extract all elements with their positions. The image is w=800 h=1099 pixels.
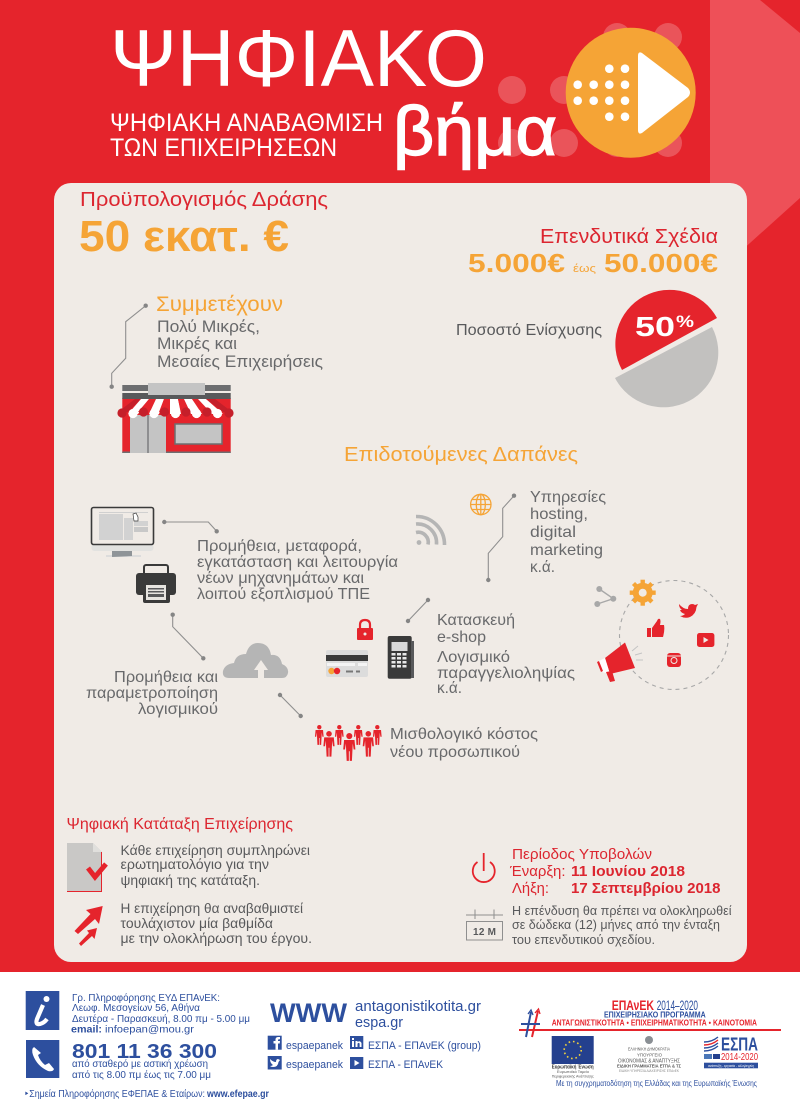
text: staff cost: νέου προσωπικού bbox=[390, 744, 520, 761]
investment plans heading: Επενδυτικά Σχέδια bbox=[540, 226, 718, 248]
icon: wifi bbox=[416, 516, 445, 545]
ministry logo: ΕΛΛΗΝΙΚΗ ΔΗΜΟΚΡΑΤΙΑ bbox=[628, 1046, 670, 1052]
text: e-shop: κ.ά. bbox=[437, 680, 462, 697]
contact details: Δευτέρα - Παρασκευή, 8.00 πμ - 5.00 μμ bbox=[72, 1013, 250, 1025]
text: software: παραμετροποίηση bbox=[86, 685, 218, 702]
icon: share bbox=[594, 586, 616, 607]
ESPA logo: ανάπτυξη - εργασία - αλληλεγγύη bbox=[708, 1063, 754, 1068]
participants heading: Συμμετέχουν bbox=[156, 293, 283, 316]
text: services: hosting, bbox=[530, 506, 588, 523]
icon: telephone bbox=[26, 1040, 59, 1078]
icon: cloud upload bbox=[223, 643, 288, 678]
pie chart: 50%: % bbox=[676, 312, 694, 331]
text: questionnaire bbox=[120, 843, 310, 888]
icon: calendar 12M bbox=[466, 910, 503, 940]
text: questionnaire: ερωτηματολόγιο για την bbox=[120, 857, 269, 872]
icon: twitter bbox=[268, 1056, 282, 1070]
text: e-shop bbox=[437, 612, 575, 697]
investment range: έως bbox=[573, 263, 596, 275]
text: equipment: λοιπού εξοπλισμού ΤΠΕ bbox=[197, 586, 370, 603]
contact details: infoepan@mou.gr bbox=[105, 1024, 195, 1036]
EPAnEK programme header bbox=[519, 997, 781, 1031]
text: project duration: του επενδυτικού σχεδίου. bbox=[512, 932, 655, 947]
EPAnEK programme header: ΕΠΑνΕΚ bbox=[612, 997, 654, 1013]
text: equipment: Προμήθεια, μεταφορά, bbox=[197, 538, 362, 555]
icon: shop bbox=[117, 383, 234, 453]
connector: printer to software bbox=[170, 612, 206, 660]
EU flag logo: Περιφερειακής Ανάπτυξης bbox=[552, 1074, 594, 1078]
www mark: WWW bbox=[270, 998, 348, 1028]
icon: calendar 12M: 12 M bbox=[473, 927, 496, 938]
icon: facebook bbox=[268, 1036, 282, 1050]
budget heading: Προϋπολογισμός Δράσης bbox=[80, 189, 328, 211]
icon: power bbox=[473, 853, 495, 882]
subtitle bbox=[110, 109, 383, 162]
submission period: Λήξη: bbox=[512, 880, 549, 897]
participants text bbox=[157, 317, 323, 371]
contact details: email: bbox=[71, 1024, 102, 1036]
text: e-shop: παραγγελιοληψίας bbox=[437, 665, 575, 682]
connector: cloud to staff bbox=[278, 693, 303, 718]
icon: gear bbox=[630, 580, 656, 606]
text: upgrade: τουλάχιστον μία βαθμίδα bbox=[120, 916, 273, 931]
icon: EPAnEK hash logo bbox=[521, 1009, 540, 1037]
icon: info bbox=[26, 991, 59, 1030]
ministry logo: ΕΙΔΙΚΗ ΥΠΗΡΕΣΙΑ ΔΙΑΧΕΙΡΙΣΗΣ ΕΠΑνΕΚ bbox=[619, 1069, 680, 1073]
text: questionnaire: Κάθε επιχείρηση συμπληρώνει bbox=[120, 843, 310, 858]
text: services: Υπηρεσίες bbox=[530, 489, 606, 506]
EPAnEK programme header: ΕΠΙΧΕΙΡΗΣΙΑΚΟ ΠΡΟΓΡΑΜΜΑ bbox=[604, 1010, 706, 1020]
participants text: Μεσαίες Επιχειρήσεις bbox=[157, 352, 323, 371]
icon: thumbs up bbox=[647, 619, 664, 637]
text: project duration: σε δώδεκα (12) μήνες από την ένταξη bbox=[512, 917, 720, 932]
websites bbox=[355, 998, 481, 1031]
investment range: 5.000€ bbox=[468, 248, 565, 278]
pie chart: 50%: 50 bbox=[635, 311, 675, 342]
submission period: 17 Σεπτεμβρίου 2018 bbox=[571, 880, 720, 897]
text: linkedin and youtube account: ΕΣΠΑ - ΕΠΑνΕΚ (group) bbox=[368, 1040, 481, 1052]
submission period: Περίοδος Υποβολών bbox=[512, 846, 652, 863]
text: software: Προμήθεια και bbox=[114, 669, 218, 686]
text: upgrade: με την ολοκλήρωση του έργου. bbox=[120, 931, 312, 946]
icon: linkedin bbox=[350, 1036, 363, 1049]
icon: megaphone bbox=[597, 642, 643, 682]
icon: document with check bbox=[67, 843, 106, 892]
pie chart: 50% bbox=[615, 290, 718, 407]
EU flag logo: Ευρωπαϊκή Ένωση bbox=[552, 1064, 594, 1070]
title word: βήμα: βήμα bbox=[393, 92, 557, 170]
text: e-shop: Κατασκευή bbox=[437, 612, 515, 629]
icon: youtube bbox=[350, 1057, 363, 1069]
subtitle: ΤΩΝ ΕΠΙΧΕΙΡΗΣΕΩΝ bbox=[110, 134, 337, 162]
text: linkedin and youtube account: ΕΣΠΑ - ΕΠΑνΕΚ bbox=[368, 1059, 444, 1071]
text: staff cost bbox=[390, 726, 538, 761]
EU flag logo: Ευρωπαϊκό Ταμείο bbox=[557, 1069, 590, 1074]
text: equipment: εγκατάσταση και λειτουργία bbox=[197, 554, 398, 571]
icon: printer bbox=[136, 565, 176, 603]
icon: instagram bbox=[667, 653, 681, 667]
text: services: κ.ά. bbox=[530, 559, 555, 576]
subtitle: ΨΗΦΙΑΚΗ ΑΝΑΒΑΘΜΙΣΗ bbox=[110, 109, 383, 137]
EU flag logo bbox=[552, 1036, 594, 1078]
text: upgrade: Η επιχείρηση θα αναβαθμιστεί bbox=[120, 901, 303, 916]
phone number: 801 11 36 300 bbox=[72, 1041, 217, 1063]
digital classification heading: Ψηφιακή Κατάταξη Επιχείρησης bbox=[66, 816, 293, 833]
investment range: 50.000€ bbox=[604, 248, 718, 278]
panel: main content bbox=[54, 183, 747, 962]
participants text: Πολύ Μικρές, bbox=[157, 317, 260, 336]
icon: twitter bbox=[679, 604, 698, 618]
icon: upward arrows bbox=[74, 906, 103, 946]
contact details: Λεωφ. Μεσογείων 56, Αθήνα bbox=[72, 1002, 200, 1014]
ministry logo: ΟΙΚΟΝΟΜΙΑΣ & ΑΝΑΠΤΥΞΗΣ bbox=[618, 1058, 680, 1064]
icon: lock bbox=[357, 620, 373, 640]
text: services: marketing bbox=[530, 542, 603, 559]
text: e-shop: e-shop bbox=[437, 629, 486, 646]
subsidised costs heading: Επιδοτούμενες Δαπάνες bbox=[344, 444, 578, 466]
text: equipment: νέων μηχανημάτων και bbox=[197, 570, 364, 587]
title: ΨΗΦΙΑΚΟ bbox=[110, 14, 487, 104]
text: e-shop: Λογισμικό bbox=[437, 649, 510, 666]
text: facebook and twitter account: espaepanek bbox=[286, 1059, 343, 1071]
footer background bbox=[0, 972, 800, 1099]
phone details: από σταθερό με αστική χρέωση bbox=[72, 1058, 208, 1070]
aid rate label: Ποσοστό Ενίσχυσης bbox=[456, 322, 602, 339]
contact details: Γρ. Πληροφόρησης ΕΥΔ ΕΠΑνΕΚ: bbox=[72, 992, 220, 1004]
text: questionnaire: ψηφιακή της κατάταξη. bbox=[120, 873, 260, 888]
icon: payment terminal bbox=[388, 636, 414, 679]
phone details: από τις 8.00 πμ έως τις 7.00 μμ bbox=[72, 1069, 211, 1081]
submission period: 11 Ιουνίου 2018 bbox=[571, 863, 685, 880]
text: services bbox=[530, 489, 606, 576]
icon: globe bbox=[471, 494, 491, 515]
websites: espa.gr bbox=[355, 1014, 403, 1031]
text: linkedin and youtube account bbox=[368, 1040, 481, 1071]
budget value: 50 εκατ. € bbox=[79, 212, 289, 261]
icon: monitor bbox=[92, 508, 154, 557]
ministry logo bbox=[617, 1036, 681, 1073]
phone details bbox=[72, 1058, 211, 1081]
social links bbox=[268, 1036, 481, 1071]
contact details bbox=[71, 992, 250, 1036]
text: project duration bbox=[512, 903, 732, 947]
social media circle bbox=[620, 580, 728, 690]
text: software: λογισμικού bbox=[138, 701, 218, 718]
participants text: Μικρές και bbox=[157, 334, 237, 353]
text: project duration: Η επένδυση θα πρέπει να ολοκληρωθεί bbox=[512, 903, 732, 918]
submission period bbox=[509, 846, 720, 897]
text: staff cost: Μισθολογικό κόστος bbox=[390, 726, 538, 743]
connector: monitor bbox=[162, 520, 219, 534]
logo: orange circle with play arrow bbox=[566, 28, 696, 158]
ESPA logo: 2014-2020 bbox=[721, 1052, 758, 1063]
icon: people bbox=[315, 725, 382, 761]
text: software bbox=[86, 669, 218, 718]
text: upgrade bbox=[120, 901, 312, 946]
investment range bbox=[468, 248, 718, 278]
EPAnEK programme header: ΑΝΤΑΓΩΝΙΣΤΙΚΟΤΗΤΑ • ΕΠΙΧΕΙΡΗΜΑΤΙΚΟΤΗΤΑ • ΚΑΙΝΟΤΟΜΙΑ bbox=[552, 1018, 757, 1028]
ministry logo: ΕΙΔΙΚΗ ΓΡΑΜΜΑΤΕΙΑ ΕΤΠΑ & ΤΣ bbox=[617, 1064, 681, 1068]
EPAnEK programme header: 2014–2020 bbox=[657, 997, 698, 1013]
ESPA logo: ΕΣΠΑ bbox=[721, 1034, 758, 1054]
text: facebook and twitter account: espaepanek bbox=[286, 1040, 343, 1052]
websites: antagonistikotita.gr bbox=[355, 998, 481, 1015]
connector: globe bbox=[486, 494, 516, 582]
connector: participants bbox=[110, 304, 148, 389]
icon: credit card bbox=[326, 650, 368, 677]
icon: youtube bbox=[697, 633, 714, 647]
connector: e-shop bbox=[406, 598, 430, 623]
ministry logo: ΥΠΟΥΡΓΕΙΟ bbox=[637, 1052, 662, 1058]
text: services: digital bbox=[530, 524, 576, 541]
ESPA logo bbox=[704, 1034, 758, 1068]
text: facebook and twitter account bbox=[286, 1040, 343, 1071]
submission period: Έναρξη: bbox=[509, 863, 566, 880]
text: equipment bbox=[197, 538, 398, 603]
